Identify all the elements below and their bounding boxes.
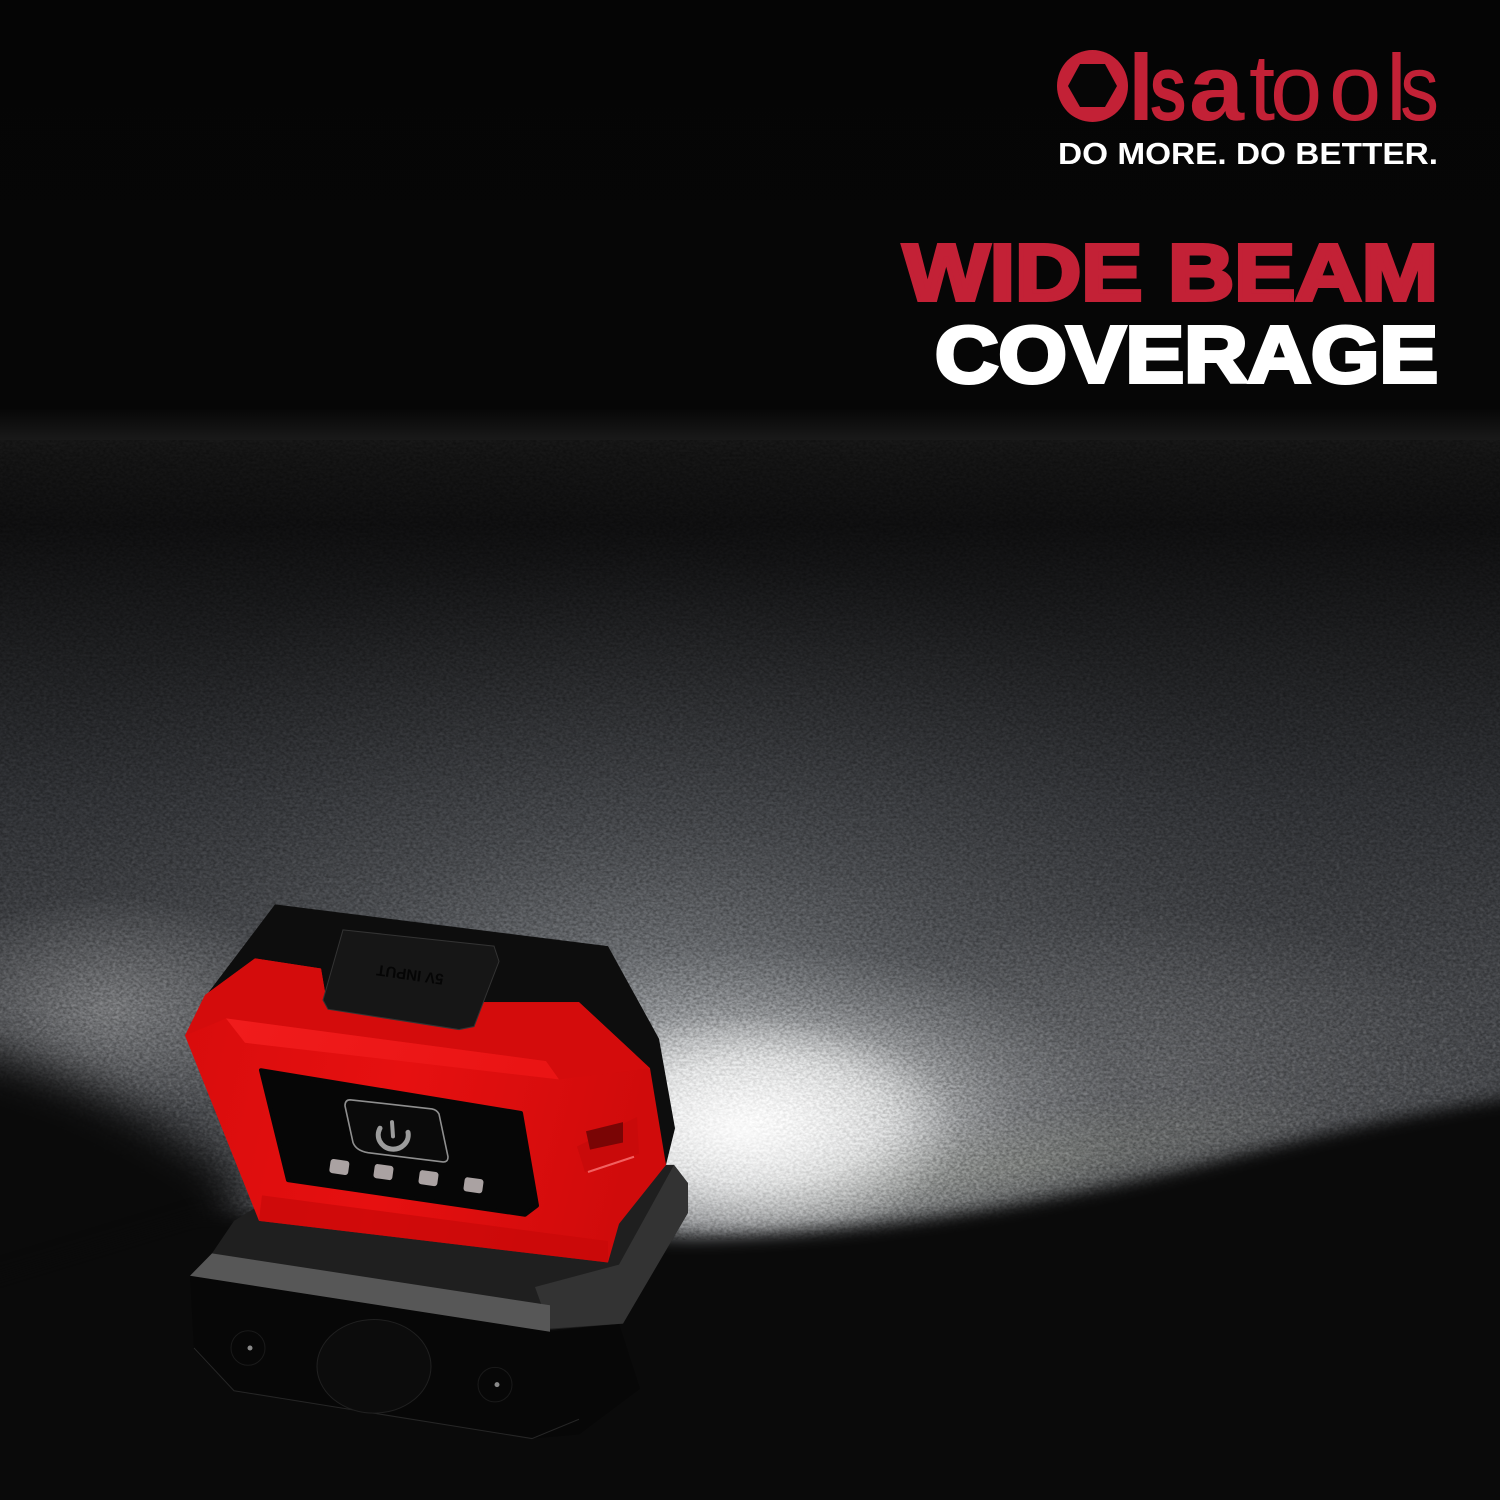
brand logo: a [1189, 35, 1245, 140]
photo background: dark backdrop and lit floor [0, 420, 1500, 1250]
tagline: DO MORE. DO BETTER. [1058, 136, 1438, 171]
brand logo: o [1329, 35, 1381, 140]
brand logo: l [1128, 35, 1154, 140]
side lanyard slot [577, 1117, 639, 1172]
brand logo: l [1386, 35, 1407, 140]
brand logo: s [1149, 35, 1187, 140]
brand logo: o [1270, 35, 1322, 140]
headlamp clip base [190, 1165, 688, 1439]
headlamp red front housing [185, 958, 666, 1263]
headline line one: WIDE BEAM [903, 228, 1438, 317]
brand logo: t [1249, 35, 1275, 140]
control panel [261, 1070, 537, 1215]
headline [903, 228, 1438, 399]
brand logo: s [1400, 35, 1439, 140]
headlamp black rear housing [205, 904, 675, 1165]
battery indicator lights [329, 1159, 484, 1194]
port tab label: 5V INPUT [375, 961, 445, 987]
power button [345, 1100, 448, 1162]
brand logo: O [1055, 34, 1130, 141]
shadow falling across the foreground [0, 1040, 1500, 1500]
brand logo [1055, 34, 1439, 141]
headline line two: COVERAGE [935, 310, 1438, 399]
product: red and black clip-on headlamp [185, 904, 688, 1439]
rubber input port tab [323, 930, 499, 1030]
